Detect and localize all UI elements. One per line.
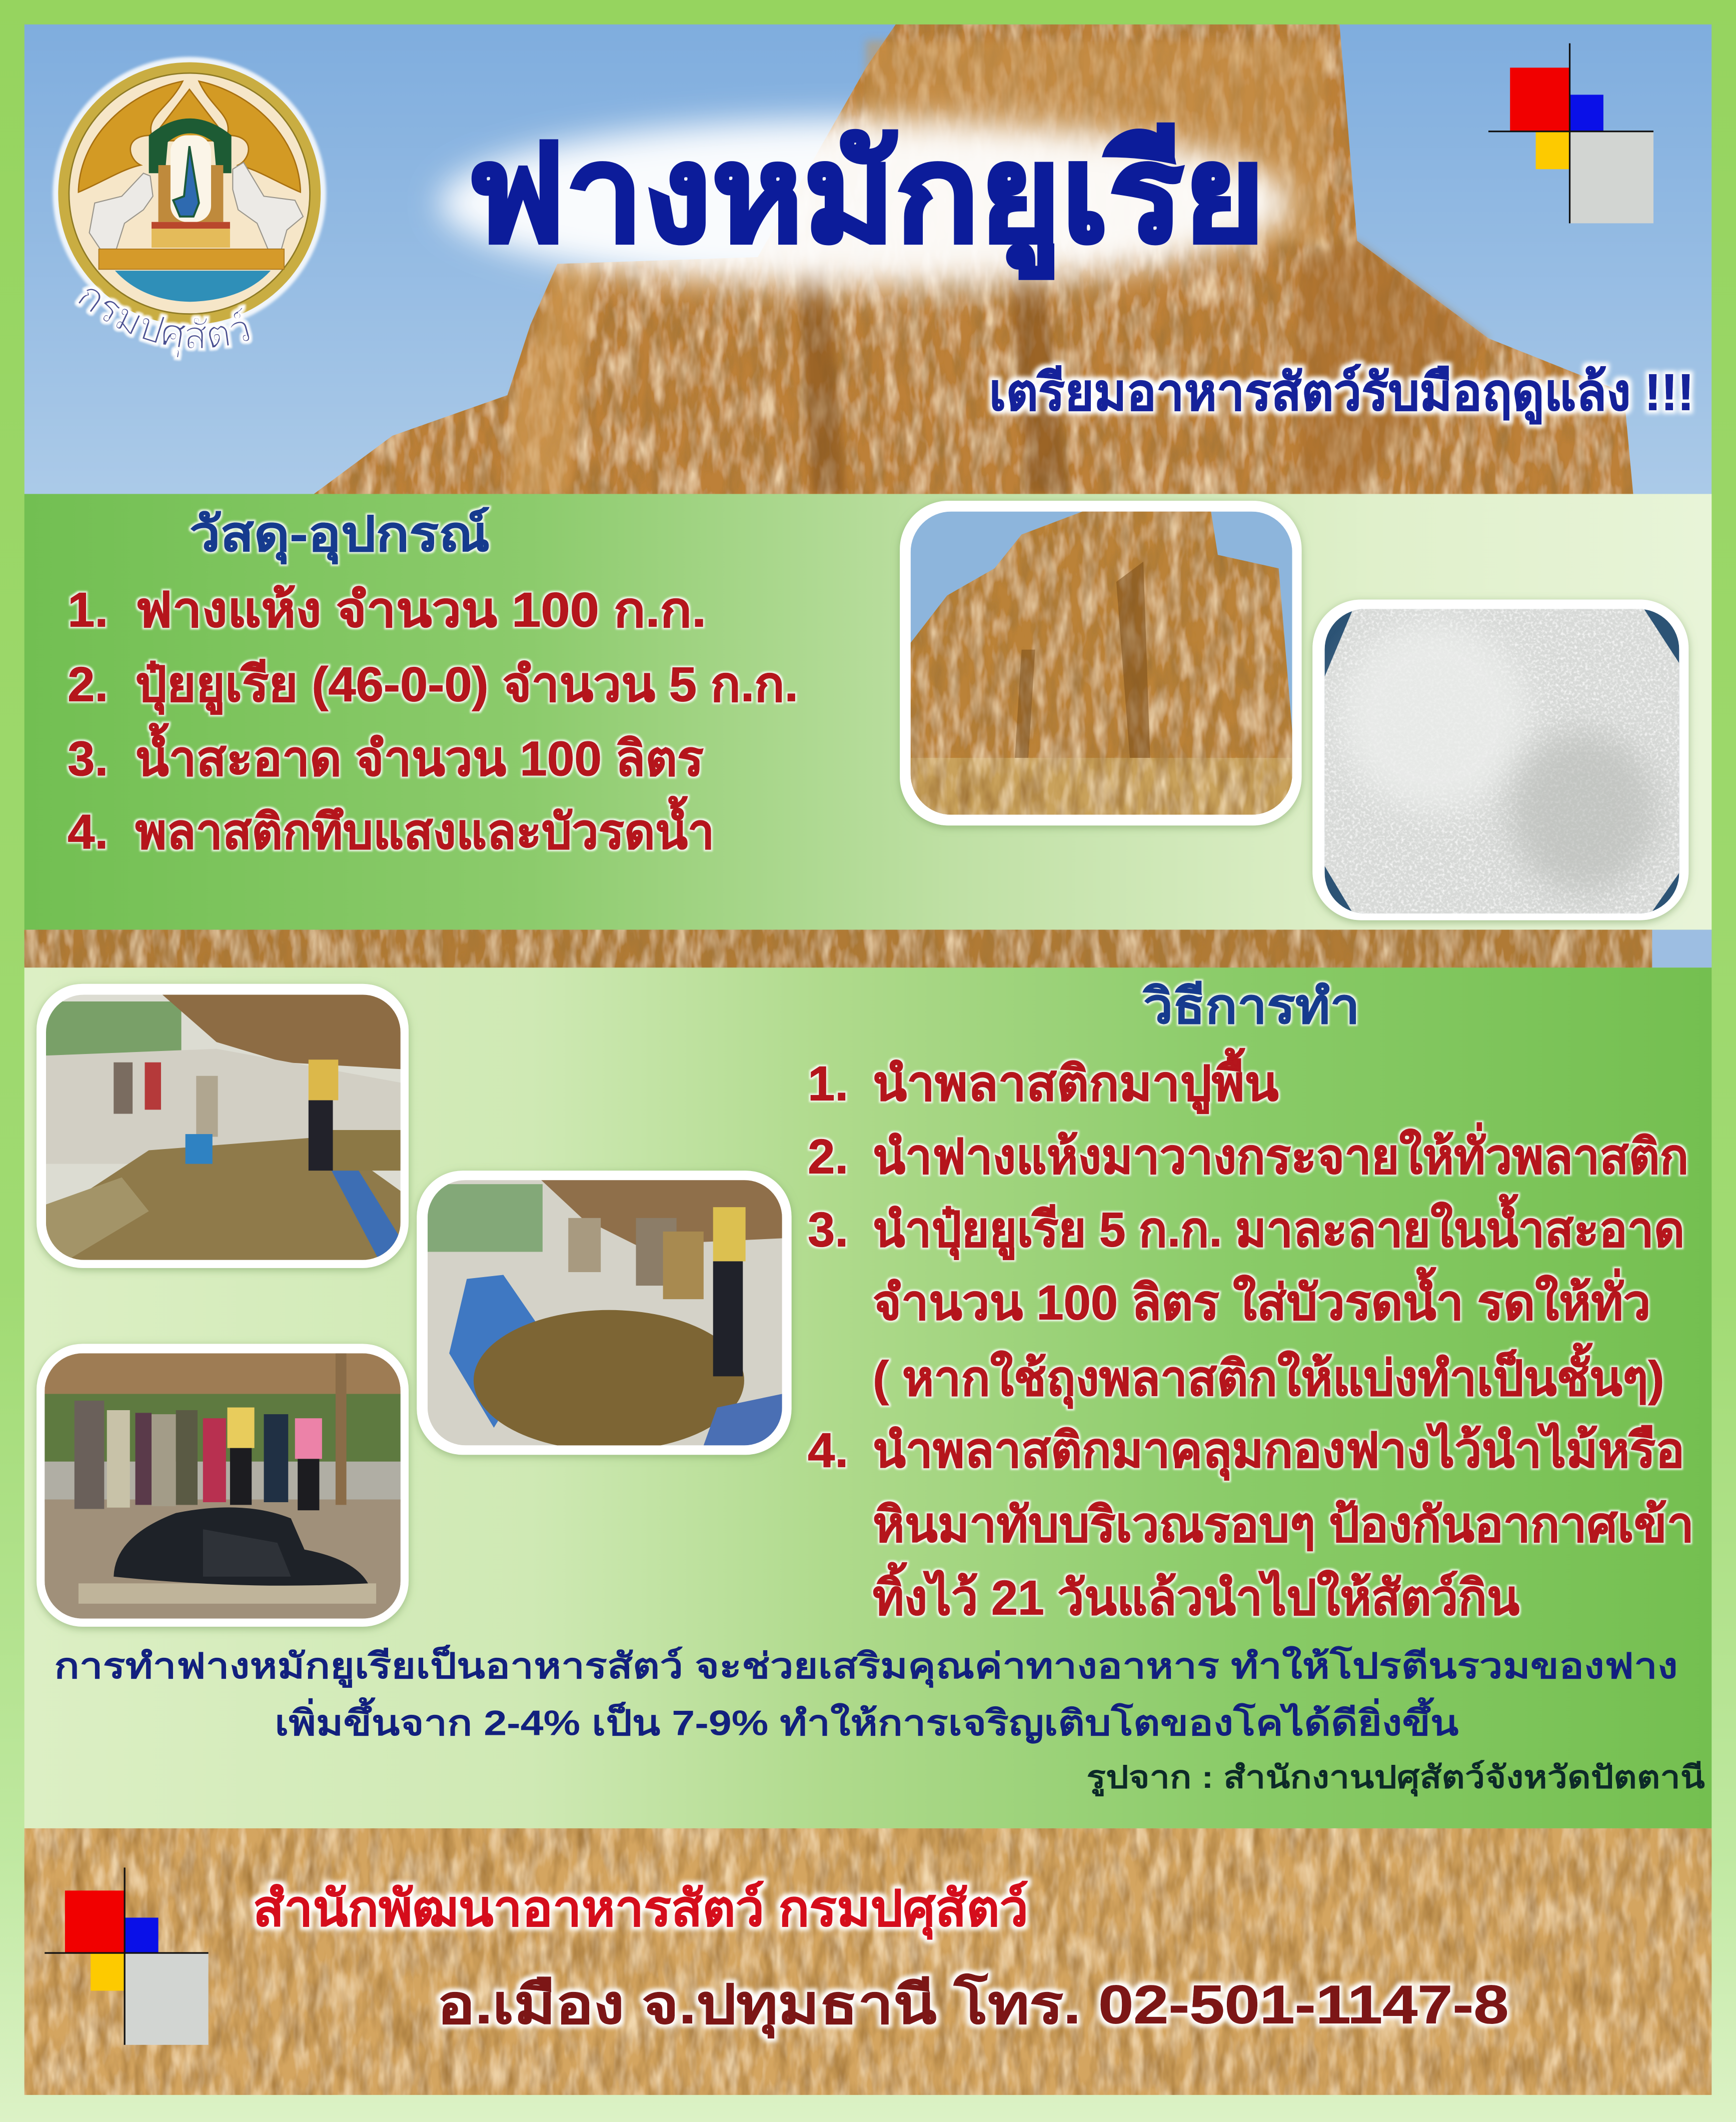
panel: banner [25,25,1711,494]
seal: figure [173,146,199,217]
people [114,1063,133,1114]
method steps [808,1047,1694,1625]
method steps: 1. [808,1056,848,1111]
method steps: 4. [808,1423,848,1478]
materials list: 3. [68,731,108,786]
title: ฟางหมักยูเรีย [467,119,1265,279]
method steps: นำพลาสติกมาปูพื้น [873,1047,1279,1114]
icon: coloured squares top [1488,44,1653,223]
benefit note [54,1645,1678,1744]
method steps: นำพลาสติกมาคลุมกองฟางไว้นำไม้หรือ [873,1423,1684,1481]
contact address: อ.เมือง จ.ปทุมธานี โทร. 02-501-1147-8 [437,1973,1508,2039]
method heading: วิธีการทำ [1143,979,1360,1033]
materials list: ฟางแห้ง จำนวน 100 ก.ก. [136,583,706,637]
seal: bead row [99,249,284,269]
method steps: ( หากใช้ถุงพลาสติกให้แบ่งทำเป็นชั้นๆ) [873,1343,1664,1409]
materials list: 2. [68,657,108,711]
method steps: หินมาทับบริเวณรอบๆ ป้องกันอากาศเข้า [873,1497,1694,1552]
seal: water [115,271,271,302]
photo: watering straw [37,984,409,1268]
seal: gold ornaments [79,81,301,192]
subtitle: เตรียมอาหารสัตว์รับมือฤดูแล้ง !!! [989,364,1694,425]
method steps: นำปุ๋ยยูเรีย 5 ก.ก. มาละลายในน้ำสะอาด [873,1194,1684,1261]
photo: urea fertiliser pellets [1312,599,1688,920]
seal: name: กรมปศุสัตว์ [74,285,253,362]
materials list: น้ำสะอาด จำนวน 100 ลิตร [136,723,704,786]
materials list [68,583,798,859]
method steps: นำฟางแห้งมาวางกระจายให้ทั่วพลาสติก [873,1123,1688,1184]
seal: horses [90,173,153,249]
materials list: ปุ๋ยยูเรีย (46-0-0) จำนวน 5 ก.ก. [136,657,798,715]
materials list: พลาสติกทึบแสงและบัวรดน้ำ [136,796,714,859]
icon: department seal [51,55,328,362]
panel: materials [25,494,1711,930]
decorative hay strip [25,930,1711,967]
benefit note: การทำฟางหมักยูเรียเป็นอาหารสัตว์ จะช่วยเสริมคุณค่าทางอาหาร ทำให้โปรตีนรวมของฟาง [54,1645,1678,1688]
materials list: 1. [68,583,108,637]
hay stack background [314,25,1633,494]
panel: footer [25,1828,1711,2095]
title glow [440,119,1292,287]
method steps: ทิ้งไว้ 21 วันแล้วนำไปให้สัตว์กิน [873,1562,1519,1625]
seal: shrine arch [149,119,232,173]
panel: method [25,967,1711,1828]
photo: spreading straw [417,1171,792,1455]
materials list: 4. [68,804,108,859]
materials heading: วัสดุ-อุปกรณ์ [190,507,490,565]
photo credit: รูปจาก : สำนักงานปศุสัตว์จังหวัดปัตตานี [1086,1760,1705,1796]
group of people [75,1401,322,1510]
benefit note: เพิ่มขึ้นจาก 2-4% เป็น 7-9% ทำให้การเจริญเติบโตของโคได้ดียิ่งขึ้น [275,1697,1458,1744]
photo: straw bale stack [900,501,1302,825]
method steps: จำนวน 100 ลิตร ใส่บัวรดน้ำ รดให้ทั่ว [873,1267,1651,1330]
hay bale shading [508,41,1488,494]
office name: สำนักพัฒนาอาหารสัตว์ กรมปศุสัตว์ [253,1881,1028,1940]
icon: coloured squares bottom [45,1867,209,2045]
method steps: 3. [808,1203,848,1257]
photo: covered pile and group [37,1344,409,1627]
method steps: 2. [808,1130,848,1184]
